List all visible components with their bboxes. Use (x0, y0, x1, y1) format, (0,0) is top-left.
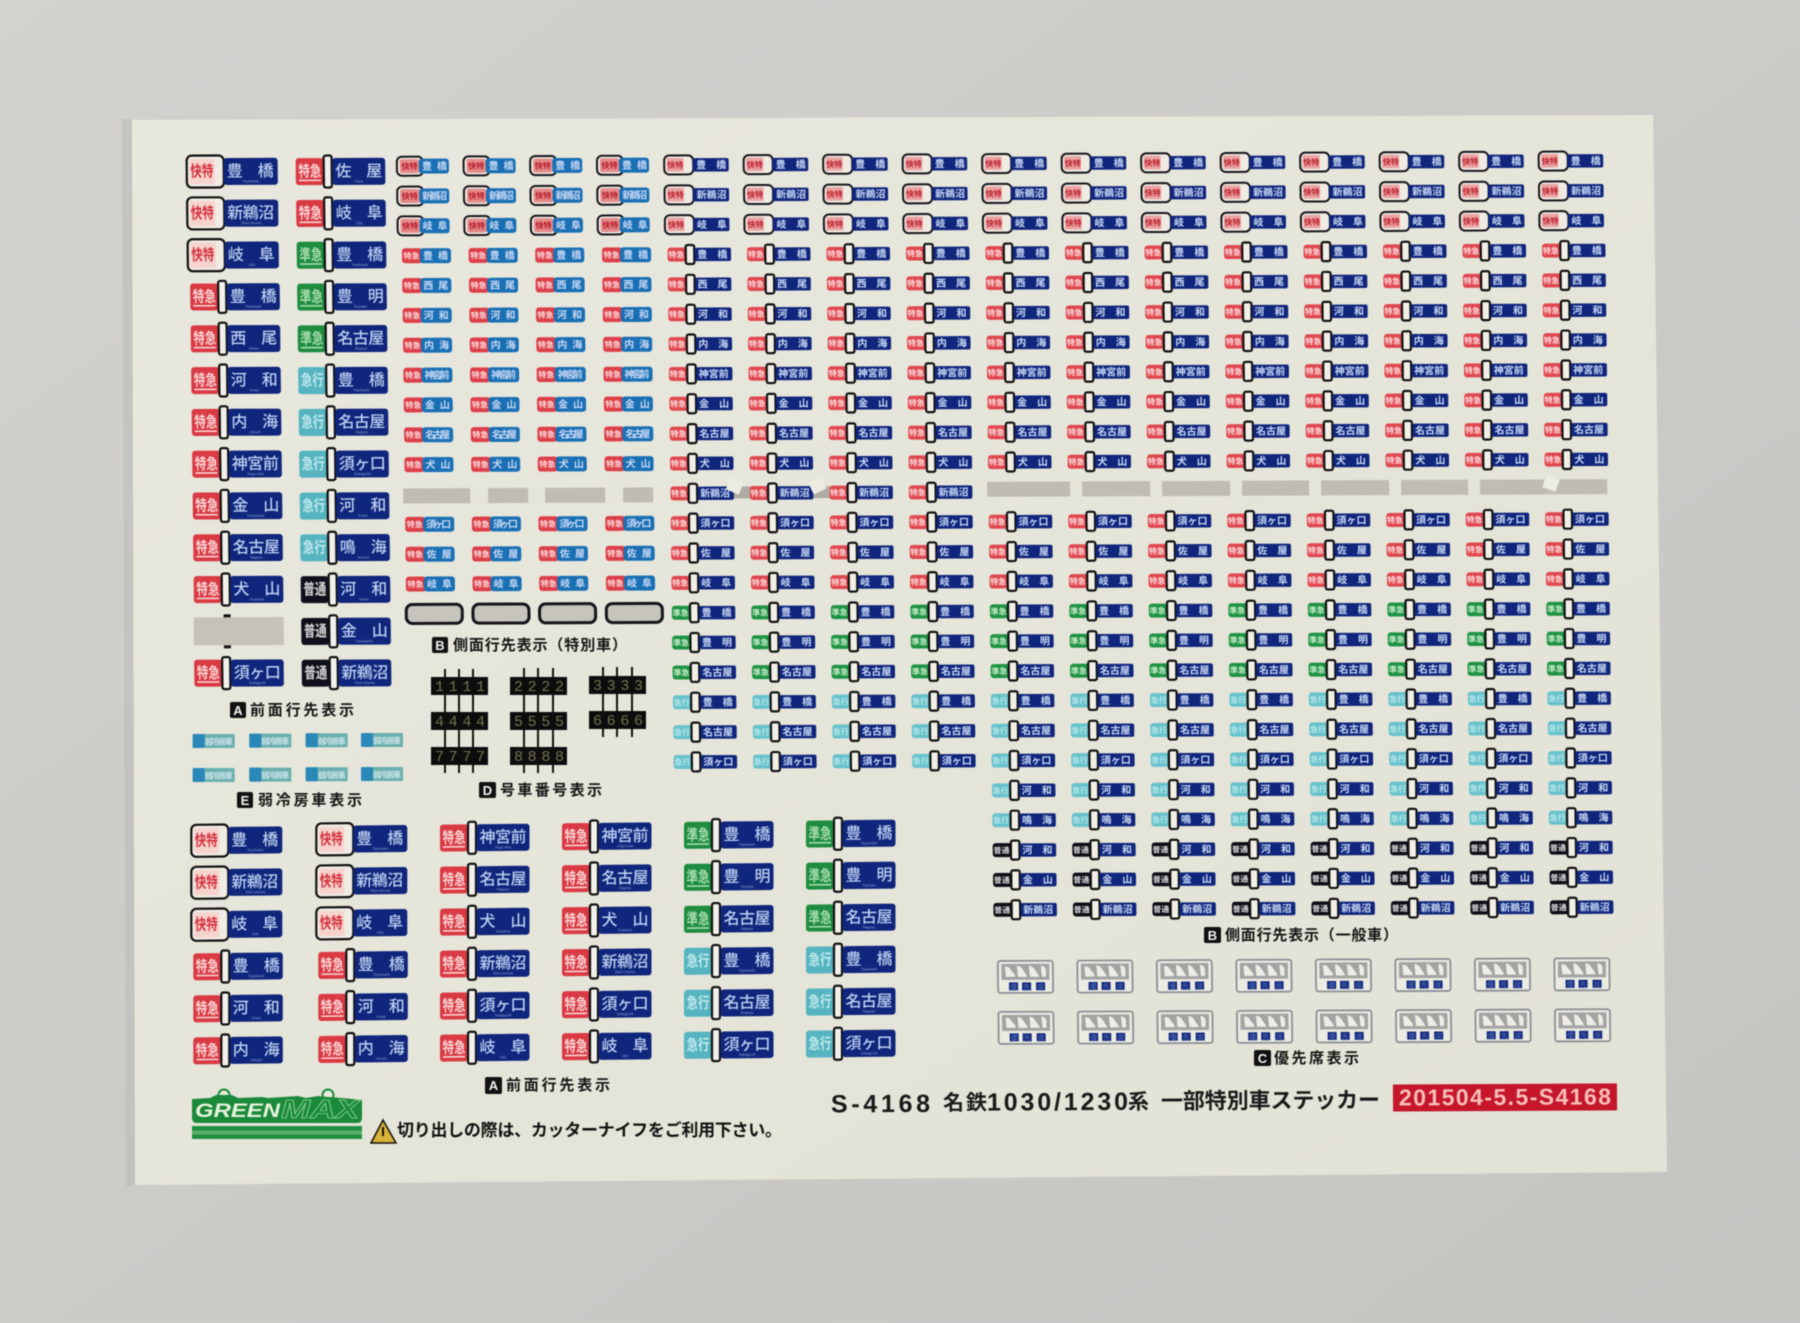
lower sticker column 4 (562, 820, 652, 1063)
panel: priority seat stickers C (998, 958, 1610, 1044)
lower sticker column 4: Inuyama (618, 928, 632, 932)
lower sticker column 6: 豊橋 (846, 824, 892, 843)
lower sticker column 4: 新鵜沼 (602, 953, 648, 971)
sticker: 特急 神宮前: 神宮前 (232, 455, 279, 473)
lower sticker column 5: Nagoya (741, 927, 753, 931)
sticker: 準急 豊橋: Toyohashi (352, 263, 368, 267)
lower sticker column 6: 豊明 (846, 866, 892, 885)
lower sticker column 3: Nagoya (497, 887, 509, 892)
sticker: 特急 西尾: Nishio (249, 347, 259, 351)
sticker: 特急 神宮前 (192, 448, 282, 480)
title: product code and name: S-4168 (831, 1090, 930, 1118)
car number column 1: 4444 (435, 714, 485, 731)
lower sticker column 2: 豊橋 (356, 830, 403, 848)
lower sticker column 1: Shin-Unuma (245, 890, 265, 894)
car number column 3 (589, 667, 646, 737)
car number column 1: 7777 (435, 749, 485, 766)
logo: GREENMAX: GREEN (195, 1101, 282, 1122)
sticker: 快特 岐阜: 岐阜 (228, 246, 275, 264)
sticker: 準急 名古屋 (298, 322, 387, 355)
sticker: 快特 新鵜沼 (187, 197, 278, 229)
title: product code and name: 系 (1128, 1091, 1149, 1114)
lower sticker column 1: Utsumi (251, 1058, 262, 1062)
label: B 側面行先表示（一般車）: 側面行先表示（一般車） (1225, 926, 1398, 944)
sticker: 急行 鳴海 (300, 531, 390, 564)
lower sticker column 1: 豊橋 (233, 957, 280, 975)
sticker: 特急 神宮前: Jingu-mae (247, 472, 264, 476)
lower sticker column 2 (316, 822, 408, 1066)
panel: weak air-conditioning stickers E (193, 733, 403, 782)
sticker: 特急 岐阜 (296, 197, 386, 229)
lower sticker column 5: 豊橋 (724, 826, 770, 844)
side stickers, general car column 11 (1459, 152, 1534, 917)
label: A 前面行先表示 lower: A (489, 1078, 499, 1093)
lower sticker column 1: Toyohashi (247, 848, 264, 852)
lower sticker column 3: Shin-Unuma (493, 971, 513, 976)
car number column 1: 1111 (435, 679, 485, 696)
side stickers, general car column 8 (1221, 153, 1295, 918)
side stickers, general car column 12 (1539, 151, 1613, 917)
sticker: 特急 西尾 (191, 322, 280, 355)
sticker: 急行 豊橋: Toyohashi (353, 388, 370, 392)
lower sticker column 3: 犬山 (480, 912, 526, 931)
sticker: 普通 金山 (301, 615, 391, 647)
lower sticker column 6: Toyohashi (861, 967, 877, 972)
sticker: 特急 河和: Kowa (250, 388, 259, 392)
sticker: 快特 豊橋 (187, 155, 278, 188)
lower sticker column 5: 豊明 (724, 868, 770, 886)
label: D 号車番号表示: D (483, 783, 492, 798)
sticker: 特急 内海 (192, 406, 281, 438)
title: product code and name: 名鉄 (943, 1092, 987, 1115)
side stickers, special car column 3 (530, 156, 596, 623)
sticker: 特急 金山: Kanayama (247, 514, 265, 518)
lower sticker column 5: Toyohashi (739, 843, 755, 847)
side stickers, general car column 1 (664, 155, 737, 772)
lower sticker column 4: Gifu (622, 1054, 628, 1058)
cut-out strip middle (730, 486, 830, 499)
lower sticker column 6: 名古屋 (846, 908, 892, 927)
sticker: 急行 鳴海: 鳴海 (340, 538, 387, 557)
side stickers, general car column 9 (1300, 152, 1375, 918)
title: product code and name: 一部特別車ステッカー (1161, 1088, 1380, 1114)
lower sticker column 1: 河和 (233, 999, 280, 1017)
lower sticker column 4: Jingu-mae (617, 844, 633, 848)
lower sticker column 5 (684, 818, 774, 1061)
panel: sticker sheet main area (187, 149, 1615, 1048)
torn paper squares (726, 473, 1560, 496)
sticker: 急行 名古屋: 名古屋 (338, 413, 385, 431)
sticker: 特急 河和: 河和 (231, 371, 278, 389)
sticker: 急行 豊橋 (298, 364, 388, 397)
lower sticker column 2: Utsumi (376, 1057, 387, 1061)
sticker: 特急 名古屋: 名古屋 (233, 538, 280, 557)
lower sticker column 3: 新鵜沼 (480, 954, 526, 973)
sticker: 特急 内海: 内海 (231, 413, 278, 431)
lower sticker column 5: Nagoya (741, 1011, 753, 1015)
side stickers, general car column 5 (982, 154, 1057, 919)
sticker: 特急 須ヶ口 (194, 657, 284, 689)
sticker: 準急 豊橋: 豊橋 (336, 246, 383, 264)
sticker: 普通 金山: 金山 (341, 622, 388, 640)
sticker: 快特 豊橋: Toyohashi (243, 179, 259, 183)
red code box: 201504-5.5-S4168 (1399, 1083, 1611, 1111)
sticker: 急行 須ヶ口: Sukaguchi (354, 472, 371, 476)
lower sticker column 5: 名古屋 (724, 994, 770, 1012)
side stickers, special car column 2 (463, 156, 529, 623)
lower sticker column 6: Nagoya (863, 1009, 875, 1013)
car number column 2 (510, 668, 567, 773)
lower sticker column 3: 岐阜 (480, 1038, 526, 1057)
lower sticker column 2: Shin-Unuma (370, 889, 390, 893)
lower sticker column 2: 豊橋 (358, 956, 405, 974)
sticker: 特急 豊橋 (190, 281, 280, 313)
sticker: 準急 豊明: Toyoake (354, 305, 367, 309)
label: D 号車番号表示: 号車番号表示 (500, 781, 602, 799)
car number column 2: 5555 (514, 714, 564, 731)
sticker: 特急 犬山: Inuyama (250, 597, 264, 601)
lower sticker column 2: 河和 (358, 998, 405, 1016)
label: E 弱冷房車表示: E (241, 793, 250, 808)
label: A 前面行先表示 upper: A (233, 703, 243, 718)
lower sticker column 3: Gifu (500, 1055, 506, 1059)
side stickers, special car column 1 (397, 156, 462, 624)
lower sticker column 1 (191, 824, 283, 1067)
lower sticker column 2: 内海 (358, 1040, 405, 1058)
cut-out strip right (987, 478, 1607, 498)
sticker: 急行 須ヶ口 (299, 448, 389, 480)
panel: front destination stickers A, lower block (191, 817, 896, 1067)
label: B 側面行先表示（特別車）: 側面行先表示（特別車） (453, 636, 627, 654)
label: B 側面行先表示（一般車）: B (1208, 928, 1217, 943)
lower sticker column 1: Gifu (252, 932, 259, 936)
lower sticker column 2: 岐阜 (356, 914, 403, 932)
sticker: 準急 豊明: 豊明 (337, 288, 384, 306)
label: C 優先席表示: 優先席表示 (1274, 1049, 1359, 1067)
sticker: 特急 豊橋: Toyohashi (245, 305, 262, 309)
sticker: 準急 名古屋: Nagoya (355, 347, 367, 351)
label: A 前面行先表示 upper: 前面行先表示 (250, 701, 354, 719)
lower sticker column 6: Sukaguchi (861, 1051, 878, 1056)
side stickers, general car column 3 (823, 155, 896, 771)
cut-out strip left (403, 487, 653, 504)
sticker: 特急 須ヶ口: Sukaguchi (249, 681, 266, 685)
sticker: 急行 河和: Kowa (358, 514, 367, 518)
lower sticker column 4: 犬山 (602, 911, 648, 929)
lower sticker column 5: Sukaguchi (739, 1053, 756, 1057)
side stickers, general car column 7 (1141, 153, 1216, 919)
lower sticker column 3 (440, 821, 530, 1064)
sticker: 準急 名古屋: 名古屋 (337, 329, 384, 348)
lower sticker column 2: Toyohashi (372, 847, 389, 851)
lower sticker column 5: Toyohashi (739, 969, 755, 973)
sticker: 特急 佐屋: 佐屋 (335, 162, 382, 181)
car number column 3: 3333 (593, 678, 643, 695)
sticker: 準急 豊橋 (297, 239, 386, 271)
sticker: 特急 岐阜: 岐阜 (336, 204, 383, 222)
icon: warning triangle (371, 1120, 396, 1143)
label: E 弱冷房車表示: 弱冷房車表示 (258, 791, 362, 809)
lower sticker column 6 (806, 817, 896, 1060)
lower sticker column 4: 須ヶ口 (602, 995, 648, 1013)
sticker: 急行 鳴海: Narumi (358, 556, 369, 560)
paper shadow (122, 118, 136, 1186)
lower sticker column 4: 名古屋 (602, 869, 648, 887)
sticker: 特急 岐阜: Gifu (356, 221, 363, 225)
label: C 優先席表示: C (1258, 1051, 1268, 1066)
sticker: 特急 名古屋 (193, 531, 283, 564)
sticker: 特急 金山: 金山 (232, 497, 279, 515)
sticker: 普通 新鵜沼: 新鵜沼 (341, 664, 388, 682)
lower sticker column 6: 名古屋 (846, 992, 892, 1011)
sticker: 特急 豊橋: 豊橋 (230, 288, 277, 306)
side stickers, general car column 6 (1062, 153, 1136, 919)
sticker: 特急 西尾: 西尾 (230, 330, 277, 348)
lower sticker column 3: Sukaguchi (495, 1013, 512, 1018)
lower sticker column 3: 名古屋 (480, 870, 526, 889)
lower sticker column 4: Nagoya (619, 886, 631, 890)
lower sticker column 5: Toyoake (740, 885, 754, 889)
car number column 1 (431, 669, 488, 773)
car number column 2: 8888 (514, 749, 564, 766)
lower sticker column 3: Jingu-mae (495, 845, 511, 850)
sticker: 特急 犬山: 犬山 (233, 580, 280, 598)
lower sticker column 1: 岐阜 (231, 915, 278, 933)
lower sticker column 1: Toyohashi (248, 974, 265, 978)
sticker: 快特 岐阜: Gifu (249, 263, 255, 267)
paper sheet (132, 115, 1667, 1185)
lower sticker column 3: Inuyama (496, 929, 510, 934)
lower sticker column 6: 須ヶ口 (846, 1034, 892, 1053)
lower sticker column 2: Toyohashi (373, 973, 390, 977)
title: product code and name: 1030/1230 (987, 1088, 1128, 1117)
lower sticker column 1: 内海 (233, 1041, 280, 1059)
logo: GREENMAX: MAX (281, 1094, 361, 1124)
sticker: 快特 新鵜沼: Shin-Unuma (241, 221, 261, 225)
sticker: 特急 佐屋 (296, 155, 385, 188)
sticker: 特急 河和 (191, 364, 281, 397)
lower sticker column 2: Gifu (377, 931, 384, 935)
sticker: 急行 名古屋 (299, 406, 388, 438)
sticker: 快特 豊橋: 豊橋 (227, 162, 274, 180)
sticker: 特急 金山 (193, 490, 282, 522)
sticker: 快特 岐阜 (188, 239, 279, 271)
lower sticker column 2: Kowa (377, 1015, 386, 1019)
panel: car number blocks D (431, 667, 646, 773)
sticker: 特急 須ヶ口: 須ヶ口 (234, 664, 281, 682)
lower sticker column 1: Kowa (252, 1016, 261, 1020)
lower sticker column 5: 須ヶ口 (724, 1036, 770, 1054)
panel: front destination stickers A, column 1 (187, 155, 284, 689)
side stickers, general car column 4 (903, 154, 976, 770)
side stickers, general car column 2 (744, 155, 817, 771)
panel: front destination stickers A, column 2 (296, 155, 391, 689)
sticker: 特急 名古屋: Nagoya (250, 556, 263, 560)
lower sticker column 6: 豊橋 (846, 950, 892, 969)
sticker: 準急 豊明 (297, 281, 387, 313)
car number column 3: 6666 (593, 713, 643, 730)
sticker: 急行 須ヶ口: 須ヶ口 (339, 455, 386, 473)
sticker: 普通 河和 (301, 573, 390, 606)
lower sticker column 4: Sukaguchi (617, 1012, 634, 1016)
warning text: 切り出しの際は、カッターナイフをご利用下さい。 (397, 1120, 782, 1140)
lower sticker column 2: 新鵜沼 (356, 872, 403, 890)
lower sticker column 6: Toyohashi (861, 841, 877, 846)
sticker: 普通 河和: Kowa (359, 597, 368, 601)
label: B 側面行先表示（特別車）: B (435, 638, 445, 653)
blank cut-out sticker (194, 614, 284, 648)
lower sticker column 5: 豊橋 (724, 952, 770, 970)
logo: GREENMAX (192, 1090, 362, 1139)
lower sticker column 4: Shin-Unuma (615, 970, 635, 974)
label: A 前面行先表示 lower: 前面行先表示 (506, 1076, 610, 1094)
lower sticker column 4: 神宮前 (602, 827, 648, 845)
lower sticker column 1: 豊橋 (231, 831, 278, 849)
sticker: 急行 河和: 河和 (339, 497, 386, 515)
sticker: 普通 新鵜沼 (302, 657, 391, 689)
side stickers, general car column 10 (1380, 152, 1454, 918)
lower sticker column 3: 神宮前 (480, 828, 526, 847)
lower sticker column 5: 名古屋 (724, 910, 770, 928)
lower sticker column 6: Toyoake (862, 883, 876, 887)
sticker: 急行 豊橋: 豊橋 (338, 371, 385, 390)
sticker: 急行 河和 (300, 490, 389, 522)
sticker: 普通 金山: Kanayama (356, 639, 373, 643)
side stickers, special car column 4 (597, 156, 662, 623)
lower sticker column 3: 須ヶ口 (480, 996, 526, 1015)
title: product code and name (831, 1087, 1380, 1118)
sticker: 快特 新鵜沼: 新鵜沼 (227, 204, 274, 222)
sticker: 普通 河和: 河和 (340, 580, 387, 599)
lower sticker column 6: Nagoya (863, 925, 875, 929)
sticker: 特急 犬山 (194, 573, 283, 606)
lower sticker column 4: 岐阜 (602, 1037, 648, 1055)
sticker: 普通 新鵜沼: Shin-Unuma (355, 681, 375, 685)
sticker: 急行 名古屋: Nagoya (356, 430, 368, 434)
lower sticker column 1: 新鵜沼 (231, 873, 278, 891)
car number column 2: 2222 (514, 679, 564, 696)
sticker: 特急 佐屋: Saya (355, 179, 363, 183)
sticker: 特急 内海: Utsumi (249, 430, 261, 434)
